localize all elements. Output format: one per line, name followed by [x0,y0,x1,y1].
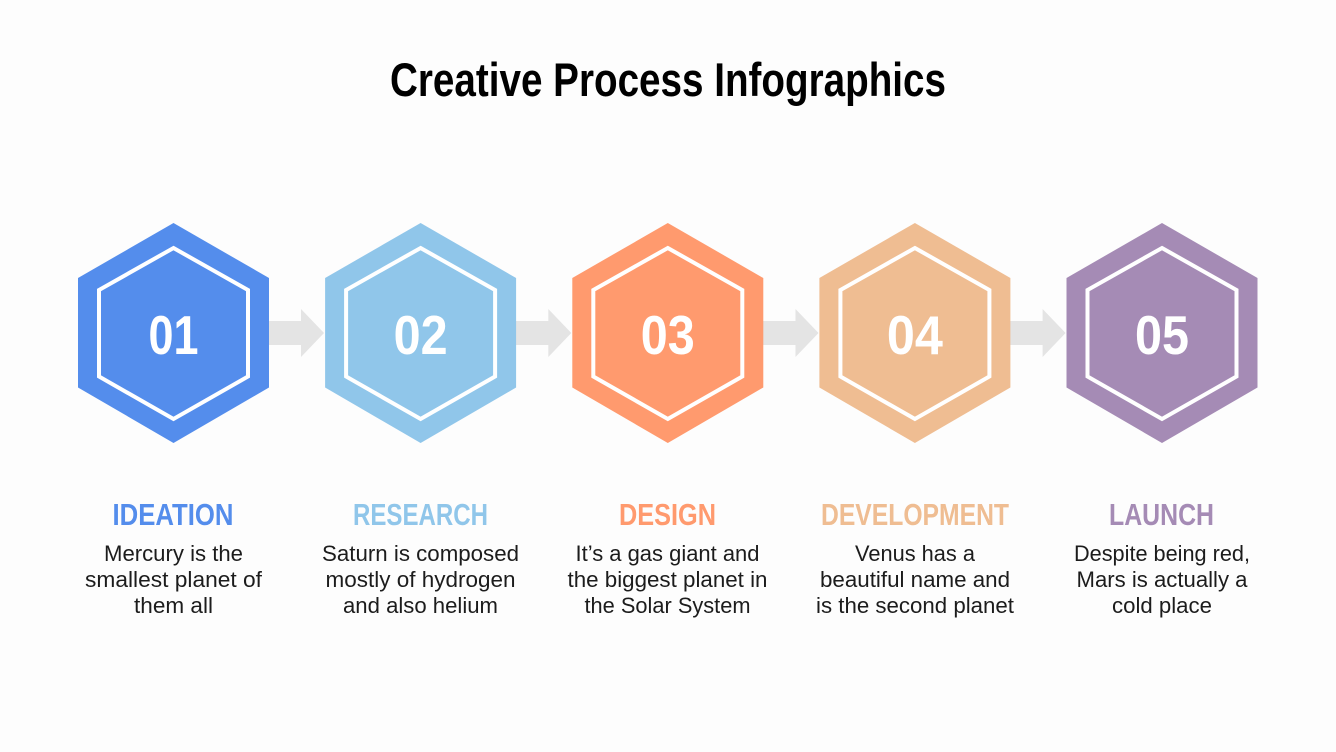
text: launch description: Mars is actually a [1076,567,1248,592]
text: ideation description: them all [134,593,213,618]
step 01 hexagon: 01 [148,304,198,366]
text: launch description: cold place [1112,593,1212,618]
text: development description: is the second planet [816,593,1014,618]
step 04 hexagon: 04 [887,304,943,366]
heading: development: DEVELOPMENT [821,497,1009,532]
text: ideation description: Mercury is the [104,541,243,566]
step 05 hexagon: 05 [1135,304,1189,366]
step 05 hexagon [1066,223,1258,443]
text: research description: Saturn is composed [322,541,519,566]
step 02 hexagon [325,223,516,443]
text: ideation description [85,541,263,618]
text: research description [322,541,519,618]
step 01 hexagon [78,223,269,443]
step 03 hexagon [572,223,763,443]
step 02 hexagon: 02 [394,304,448,366]
arrow: step 1 to 2 [268,309,324,357]
title: Creative Process Infographics [390,53,946,106]
heading: ideation: IDEATION [112,497,234,532]
arrow: step 3 to 4 [762,309,818,357]
text: research description: and also helium [343,593,498,618]
text: ideation description: smallest planet of [85,567,263,592]
text: development description: beautiful name and [820,567,1010,592]
step 04 hexagon [819,223,1010,443]
text: design description [568,541,768,618]
step 03 hexagon: 03 [641,304,695,366]
heading: research: RESEARCH [353,497,488,532]
heading: launch: LAUNCH [1109,497,1214,532]
text: design description: the Solar System [584,593,750,618]
text: launch description: Despite being red, [1074,541,1250,566]
arrow: step 2 to 3 [515,309,571,357]
text: launch description [1074,541,1250,618]
heading: design: DESIGN [619,497,716,532]
text: design description: It’s a gas giant and [576,541,760,566]
text: design description: the biggest planet in [568,567,768,592]
text: development description [816,541,1014,618]
text: research description: mostly of hydrogen [326,567,516,592]
arrow: step 4 to 5 [1010,309,1066,357]
text: development description: Venus has a [855,541,976,566]
